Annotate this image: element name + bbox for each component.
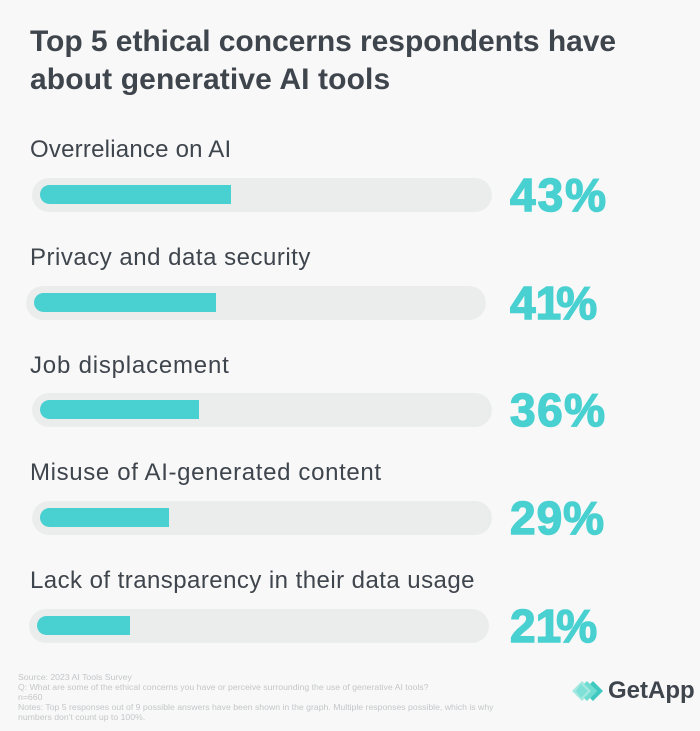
- bar: misuse of AI-generated content: [32, 501, 492, 535]
- value: 21%: 21%: [510, 600, 597, 652]
- source notes: Source: 2023 AI Tools Survey: [18, 672, 132, 682]
- title: about generative AI tools: [30, 63, 390, 96]
- value: 29%: 29%: [510, 492, 605, 544]
- title: [30, 25, 616, 96]
- logo: GetApp: [572, 677, 695, 704]
- source notes: n=660: [18, 692, 42, 702]
- wordmark: GetApp: [608, 677, 695, 704]
- bar: privacy and data security: [26, 286, 486, 320]
- value: 43%: 43%: [510, 169, 608, 221]
- bar: overreliance on AI: [32, 178, 492, 212]
- bar: job displacement: [32, 393, 492, 427]
- label: lack of transparency: Lack of transparency in their data usage: [30, 567, 475, 594]
- label: misuse of AI-generated content: Misuse of AI-generated content: [30, 459, 382, 486]
- value: 36%: 36%: [510, 384, 607, 436]
- source notes: Q: What are some of the ethical concerns you have or perceive surrounding the use of generative AI tools?: [18, 682, 428, 692]
- source notes: [18, 672, 494, 722]
- icon: GetApp diamonds: [572, 681, 603, 701]
- label: overreliance on AI: Overreliance on AI: [30, 136, 231, 163]
- bar: lack of transparency: [29, 609, 489, 643]
- source notes: numbers don't count up to 100%.: [18, 712, 145, 722]
- title: Top 5 ethical concerns respondents have: [30, 25, 616, 58]
- value: 41%: 41%: [510, 277, 597, 329]
- label: job displacement: Job displacement: [30, 352, 230, 379]
- label: privacy and data security: Privacy and data security: [30, 244, 311, 271]
- source notes: Notes: Top 5 responses out of 9 possible answers have been shown in the graph. Multiple responses possible, which is why: [18, 702, 494, 712]
